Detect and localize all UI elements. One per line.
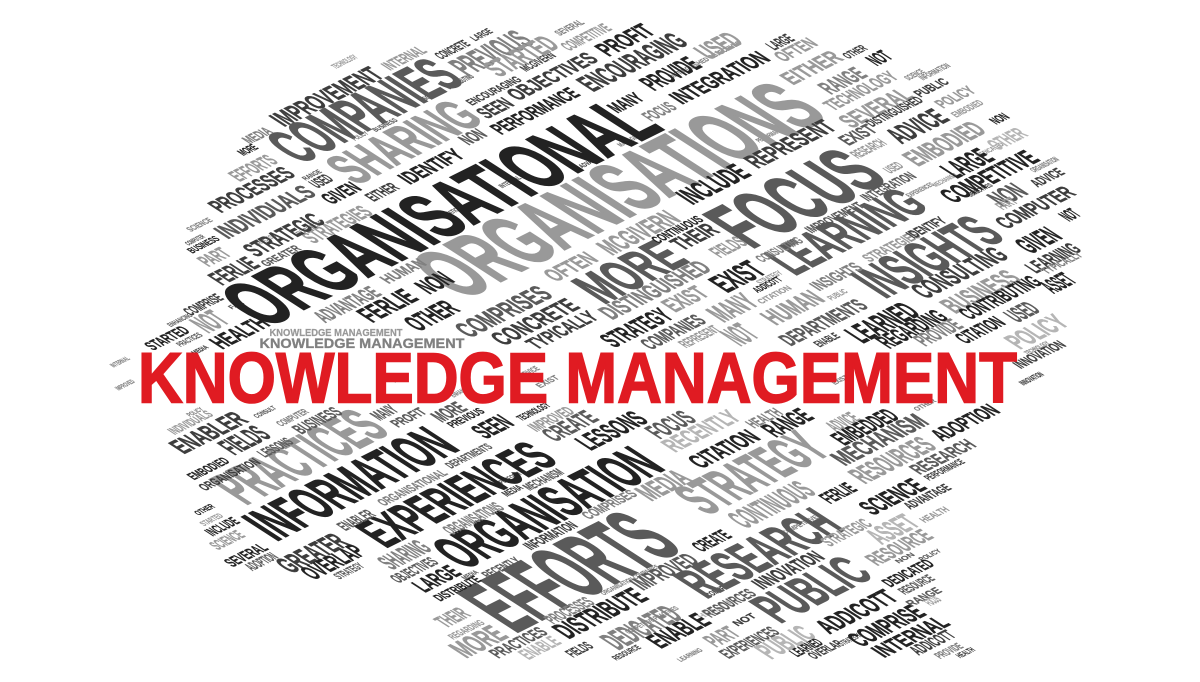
medium words, lower left: DISTRIBUTE [430, 574, 486, 604]
medium words, lower left: LARGE [406, 562, 468, 596]
medium words, upper left: HUMAN [375, 256, 431, 286]
word: EFFORTS: EFFORTS [436, 498, 704, 646]
medium words, lower right: MEDIA [627, 465, 699, 505]
small filler words: ADVICE [517, 365, 543, 379]
medium words, upper right: LARGE [761, 31, 799, 53]
word: INFORMATION: INFORMATION [229, 419, 473, 549]
medium words, lower right: INNOVATION [1017, 371, 1047, 387]
small filler words: SCIENCE [184, 216, 216, 234]
medium words, upper left: PERFORMANCE [484, 84, 586, 138]
medium words, upper right: MANY [699, 289, 767, 327]
medium words, upper right: REPRESENT [675, 324, 725, 350]
medium words, lower right: ADOPTION [926, 401, 1006, 445]
medium words, lower left: DISTRIBUTE [544, 583, 656, 643]
small filler words: DISTINGUISHED OBJECTIVES [666, 40, 744, 80]
medium words, lower left: CREATE [535, 407, 605, 445]
medium words, upper left: STRATEGIC [236, 209, 332, 261]
small filler words: CITATION [440, 205, 464, 219]
medium words, upper left: HEALTH [204, 313, 276, 353]
medium words, lower right: COMPRISE [841, 601, 933, 651]
medium words, upper left: NOT [183, 306, 237, 338]
medium words, lower right: CREATE [687, 527, 737, 555]
medium words, upper left: NON [408, 268, 462, 298]
medium words, lower right: EXPERIENCES [715, 624, 785, 662]
small filler words: CONTRIBUTING [443, 73, 477, 91]
medium words, upper right: REPRESENT [737, 116, 843, 172]
medium words, lower left: INDIVIDUALS [165, 409, 217, 437]
medium words, lower left: BUSINESS [288, 405, 348, 437]
small filler words: HEALTH [695, 599, 735, 621]
small filler words: TECHNOLOGY [329, 53, 361, 71]
medium words, upper right: STRATEGY [593, 304, 681, 352]
small filler words: BUSINESS [370, 117, 400, 133]
medium words, upper right: DISTINGUISHED [862, 95, 928, 129]
word: SHARING: SHARING [311, 91, 497, 193]
small filler words: EXPERIENCES [904, 181, 936, 199]
medium words, upper right: EXIST [834, 121, 883, 149]
medium words, lower right: HEALTH [741, 405, 787, 431]
medium words, lower right: STRATEGIC [816, 516, 878, 550]
medium words, upper right [590, 28, 1087, 354]
small filler words: NON [893, 551, 918, 565]
medium words, upper left: PROCESSES [202, 163, 302, 217]
medium words, upper left: FERLIE [350, 285, 426, 327]
medium words, upper left: IDENTIFY [393, 146, 471, 188]
small filler words: SEVERAL [552, 18, 588, 38]
small filler words: ADVANCE [576, 155, 604, 169]
small filler words: POLICY [184, 406, 206, 418]
medium words, upper right: BUSINESS [933, 266, 1029, 318]
medium words, upper right: COMPANIES [634, 311, 712, 353]
medium words, upper left: GREATER [258, 243, 304, 269]
medium words, lower left: RECENTLY [478, 555, 526, 581]
medium words, lower left: DEPARTMENTS [442, 442, 496, 470]
medium words, upper right: EMBODIED [949, 99, 987, 119]
medium words, upper right: ADVICE [1027, 166, 1069, 190]
medium words, lower right: FOCUS [921, 594, 945, 608]
medium words, lower right: OVERLAP [805, 638, 847, 662]
word: INSIGHTS: INSIGHTS [837, 207, 1019, 307]
word: RESEARCH: RESEARCH [661, 500, 857, 606]
medium words, upper right: RESEARCH [847, 137, 891, 161]
medium words, lower right: FERLIE [813, 479, 863, 507]
small filler words: ENCOURAGING [463, 75, 525, 107]
word: PUBLIC: PUBLIC [738, 549, 886, 631]
medium words, upper right: ASSET [1033, 269, 1083, 297]
medium words, upper right: COMPETITIVE [933, 147, 1047, 207]
medium words, upper left: OFTEN [537, 248, 605, 286]
medium words, upper right: LEARNED [837, 298, 929, 348]
small filler words: RESOURCE [610, 644, 644, 662]
medium words, lower right: ADDICOTT [905, 628, 961, 658]
medium words, lower left: ORGANISATIONS [438, 500, 510, 538]
medium words, upper left: FERLIE [202, 253, 266, 289]
medium words, upper right: CONSULTING [904, 243, 1016, 303]
medium words, upper left [140, 20, 696, 353]
small filler words: CONSULT [251, 405, 279, 419]
medium words, lower left: PROCESSES [540, 595, 600, 627]
larger horizontal repeat: knowledge management: KNOWLEDGE MANAGEMENT [260, 335, 465, 351]
medium words, upper left: CONCRETE [484, 295, 586, 349]
medium words, lower left: IMPROVED [523, 404, 579, 434]
medium words, upper right: INTEGRATION [857, 170, 921, 204]
medium words, upper left: EFFORTS [223, 151, 283, 185]
medium words, upper left: MORE [234, 142, 262, 158]
medium words, lower right: MECHANISM [824, 410, 936, 470]
medium words, lower left: SEVERAL [219, 540, 273, 570]
medium words, upper right: STRATEGIES [859, 229, 925, 265]
medium words, upper right: HUMAN [754, 286, 832, 330]
small filler words: POLICY [349, 130, 371, 142]
medium words, lower right: INNOVATION [1010, 339, 1070, 371]
small filler words: PUBLIC [825, 288, 851, 302]
small filler words: LEARNING [675, 647, 705, 663]
medium words, lower left: MANY [366, 402, 404, 424]
small filler words: INTERNAL [108, 355, 132, 369]
small filler words: INTERNAL [496, 175, 524, 189]
medium words, lower right: INNOVATION [746, 547, 830, 593]
medium words, upper right: FIELDS [703, 233, 753, 261]
medium words, upper right: COMPUTER [990, 183, 1082, 233]
medium words, lower right: RESOURCE [860, 527, 940, 569]
medium words, upper right: POLICY [998, 310, 1076, 354]
word: FOCUS: FOCUS [684, 136, 906, 260]
head-shaped word cloud: DEDICATED [593, 601, 691, 655]
medium words, lower left: STRATEGY [330, 561, 368, 581]
small filler words: PROCESS [251, 233, 279, 247]
medium words, lower left: SCIENCE [205, 528, 249, 552]
medium words, upper left: USED [304, 171, 338, 191]
medium words, upper right: ADDICOTT [750, 275, 786, 295]
medium words, lower left: MORE [442, 621, 516, 663]
medium words, lower left: LESSONS [569, 407, 655, 455]
medium words, upper right: MANY [602, 90, 650, 116]
medium words, upper left: NON [453, 126, 493, 148]
small filler words: MECHANISM [930, 172, 960, 188]
small filler words: PRACTICES [174, 331, 206, 349]
small filler words: BUSINESS [294, 219, 326, 237]
small filler words: MANAGING [615, 132, 645, 148]
small filler words: PERFORMANCE [754, 126, 786, 144]
small filler words: FOCUS [389, 372, 411, 384]
medium words, lower left: COMPRISES [578, 488, 642, 522]
medium words, lower left: PREVIOUS [444, 406, 488, 430]
medium words, lower left: MECHANISM [520, 467, 568, 493]
medium words, upper left: INTERNAL [377, 43, 432, 73]
small filler words: ORGANISATION COMPANIES [598, 564, 662, 596]
small filler words: MCGIVERN [517, 50, 559, 74]
small filler words: RANGE [300, 168, 324, 182]
medium words, upper right: SEVERAL [832, 84, 920, 132]
medium words, upper right: RANGE [812, 64, 874, 98]
medium words, upper right: CITATION [949, 313, 1011, 347]
medium words, upper left: OTHER [397, 296, 467, 336]
medium words, lower left: ORGANISATION [195, 457, 265, 493]
small filler words: MEDIA [189, 344, 211, 356]
medium words, upper right: PROVIDE [908, 316, 970, 350]
medium words, lower right: PROVIDE [931, 641, 967, 661]
medium words, lower right: LEARNED [786, 637, 828, 659]
medium words, lower left: EMBODIED [184, 456, 234, 482]
medium words, lower right: IMPROVED [624, 550, 706, 594]
medium words, upper right: DISTINGUISHED [592, 257, 718, 323]
medium words, lower right [624, 339, 1070, 663]
medium words, lower left: ENABLE [513, 633, 567, 663]
medium words, lower left: ADOPTION [241, 551, 283, 573]
head-shaped word cloud: ORGANISATION [1028, 156, 1062, 174]
medium words, lower left: MEDIA [500, 484, 526, 498]
medium words, upper right: LARGE [932, 143, 1002, 183]
medium words, lower right: SCIENCE [852, 475, 934, 519]
small filler words: INFORMATION [916, 62, 954, 82]
medium words, lower left: REGARDING [446, 619, 488, 641]
medium words, upper right: POLICY [930, 83, 980, 111]
small filler words: POLICY [916, 547, 944, 562]
word: MORE: MORE [558, 232, 702, 312]
medium words, upper right: PROVIDE [633, 53, 709, 95]
medium words, upper left: COMPRISE [180, 292, 228, 318]
medium words, lower right: ADVICE [820, 409, 866, 435]
medium words, upper left: PART [192, 244, 237, 270]
medium words, upper right: CONTRIBUTING [954, 273, 1048, 323]
medium words, lower right: DEDICATED [877, 556, 939, 590]
medium words, upper right: CONTINUOUS [648, 214, 708, 246]
medium words, lower right: RECENTLY [655, 406, 747, 456]
medium words, upper left: PROFIT [588, 20, 662, 60]
medium words, lower right: FOCUS [639, 407, 703, 443]
medium words, upper left: STRATEGIES [297, 203, 379, 247]
medium words, upper right: ENABLE [811, 331, 843, 349]
medium words, upper right: REGARDING [869, 306, 955, 352]
medium words, upper left: IMPROVEMENT [263, 63, 391, 131]
small filler words: COMPETITIVE [779, 514, 821, 536]
word: PRACTICES: PRACTICES [196, 400, 404, 514]
small filler words: FAR [226, 299, 246, 311]
medium words, upper left: TYPICALLY [520, 307, 604, 353]
small filler words: STARTED [198, 512, 227, 528]
small filler words: COMPRISE [703, 581, 737, 599]
small filler words: ENHANCING [165, 312, 195, 328]
medium words, upper left: EITHER [360, 180, 404, 204]
medium words, upper right: FOCUS [638, 100, 682, 124]
medium words, upper right: INTEGRATION [663, 48, 777, 108]
small filler words: OTHER [192, 503, 218, 517]
medium words, upper right: THEIR [664, 220, 726, 254]
medium words, upper right: NON [986, 111, 1014, 127]
medium words, lower left: ORGANISATIONAL [374, 467, 452, 508]
medium words, upper right: CONSULTING [752, 235, 808, 265]
medium words, lower right: RANGE [903, 585, 945, 609]
small filler words: MEDIA [459, 569, 481, 581]
medium words, lower left: SEEN [465, 411, 521, 443]
medium words, upper right: ADVICE [877, 104, 957, 148]
medium words, upper left: ADVANTAGE [308, 284, 388, 326]
medium words, upper right: INSIGHTS [806, 260, 868, 294]
medium words, lower left: OVERLAP [294, 540, 372, 584]
medium words, upper right: USED [688, 28, 750, 64]
medium words, lower right: ADDICOTT [808, 586, 906, 638]
medium words, upper right: PART [992, 195, 1022, 213]
head-shaped word cloud [108, 18, 1087, 663]
medium words, upper right: EMBODIED [896, 117, 994, 171]
medium words, upper right: TECHNOLOGY [818, 68, 904, 114]
medium words, lower left: LESSONS [254, 436, 298, 460]
medium words, lower left: SHARING [371, 536, 439, 574]
small filler words: OTHER [911, 398, 939, 412]
medium words, lower left: GREATER [267, 528, 357, 578]
medium words, lower left: INCLUDE [202, 515, 244, 539]
small filler words: CITATION [755, 284, 795, 306]
medium words, upper right: PUBLIC [911, 76, 953, 100]
medium words, upper right: INCLUDE [668, 159, 758, 209]
medium words, upper right: EXIST [702, 256, 774, 298]
medium words, lower right: RESOURCES [697, 586, 761, 620]
small filler words: ENHANCE [448, 385, 472, 399]
small filler words: COMPETITIVE PRACTICES [623, 605, 681, 635]
small filler words: EXIST [829, 374, 851, 386]
word: ORGANISATION: ORGANISATION [418, 438, 678, 578]
medium words, lower left: OBJECTIVES [385, 554, 443, 586]
medium words, lower left: PRACTICES [485, 625, 553, 661]
medium words, upper left: STARTED [140, 323, 194, 353]
small filler words: COMPUTER [183, 233, 207, 247]
medium words, lower right: CONTINUOUS [720, 477, 824, 533]
medium words, upper right: EXIST [655, 282, 715, 316]
medium words, lower right: RESEARCH [905, 436, 981, 478]
medium words, upper right: DEPARTMENTS [774, 296, 874, 350]
medium words, lower right: EMBEDDED [824, 405, 906, 449]
medium words, upper right: OFTEN [769, 35, 823, 65]
medium words, lower left: COMPUTER [274, 408, 312, 428]
medium words, lower left: INFORMATION [520, 519, 582, 553]
medium words, lower left [163, 399, 691, 663]
medium words, lower right: RANGE [755, 404, 821, 442]
small filler words: HEALTH [917, 505, 953, 525]
title: KNOWLEDGE MANAGEMENT [138, 340, 1017, 418]
medium words, upper left: COMPRISES [448, 282, 560, 342]
medium words, upper left: INDIVIDUALS [207, 181, 323, 243]
medium words, upper left: BUSINESS [185, 235, 223, 255]
small filler words: IMPROVED [113, 378, 137, 392]
medium words, upper right: USED [880, 160, 908, 176]
small horizontal repeat: knowledge management: KNOWLEDGE MANAGEMENT [270, 328, 402, 339]
medium words, lower right: ASSET [857, 509, 927, 549]
medium words, lower right: HEALTH [954, 646, 978, 660]
medium words, upper right: LEARNING [1019, 240, 1087, 276]
medium words, lower right: PART [698, 623, 747, 651]
medium words, lower right: ADVANTAGE [900, 482, 956, 512]
medium words, upper right: USED [997, 298, 1047, 326]
small filler words: LARGE [468, 27, 496, 43]
medium words, lower right: RESOURCES [840, 432, 944, 488]
medium words, upper right: GIVEN [1007, 222, 1069, 258]
medium words, lower left: MORE [425, 399, 473, 425]
small filler words: STRATEGY [836, 632, 865, 648]
small filler words: SCIENCE [420, 88, 444, 102]
medium words, upper right: IMPROVEMENT [802, 200, 869, 236]
medium words, lower right: ENABLE [640, 609, 718, 653]
medium words, lower left: ENABLER [163, 408, 255, 458]
medium words, lower left: FIELDS [562, 640, 598, 660]
medium words, upper right: OTHER [981, 124, 1033, 154]
medium words, lower left: ENABLER [332, 507, 380, 533]
small filler words: PERFORM [496, 471, 524, 485]
medium words, upper right: NOT [860, 47, 898, 69]
medium words, upper left: CONCRETE [432, 38, 474, 62]
medium words, upper right: MCGIVERN [590, 206, 688, 260]
small filler words: DEDICATED [974, 141, 1007, 159]
small filler words: STRATEGY [754, 269, 786, 287]
medium words, upper left: MEDIA [239, 125, 277, 147]
word: LEARNING: LEARNING [752, 181, 942, 283]
medium words, lower left: FIELDS [210, 421, 278, 459]
small filler words: NOT [730, 612, 760, 628]
medium words, lower right: TECHNOLOGY [1022, 340, 1052, 356]
small filler words [108, 18, 1062, 663]
medium words, lower left: PROFIT [387, 406, 431, 430]
medium words, upper right: NOT [1054, 205, 1086, 224]
medium words, lower right: PERFORMANCE [922, 458, 968, 482]
medium words, upper right: OTHER [839, 43, 871, 61]
medium words, lower right: CITATION [681, 426, 767, 472]
word: STRATEGY: STRATEGY [660, 423, 844, 523]
medium words, upper right: IDENTIFY [903, 215, 951, 241]
medium words, lower left: TECHNOLOGY [514, 401, 554, 423]
medium words, upper left: OBJECTIVES [501, 50, 605, 104]
small filler words: SCIENCE [902, 68, 928, 82]
medium words, lower left: THEIR [429, 605, 477, 631]
medium words, upper left: GIVEN [315, 178, 367, 208]
medium words, upper left: SEEN [470, 94, 520, 122]
small filler words: OBJECTIVES [965, 182, 995, 198]
word: EXPERIENCES: EXPERIENCES [343, 434, 571, 556]
medium words, lower right: PUBLIC [747, 621, 823, 663]
medium words, upper right: NOT [712, 319, 768, 351]
medium words, upper right: EITHER [774, 47, 850, 89]
small filler words: EXIST [534, 374, 563, 390]
medium words, upper right: TYPICALLY [1038, 250, 1086, 276]
medium words, lower right: INTERNAL [866, 613, 956, 661]
medium words, upper right: NON [981, 179, 1035, 211]
medium words, lower right: RESOURCE [895, 573, 939, 597]
